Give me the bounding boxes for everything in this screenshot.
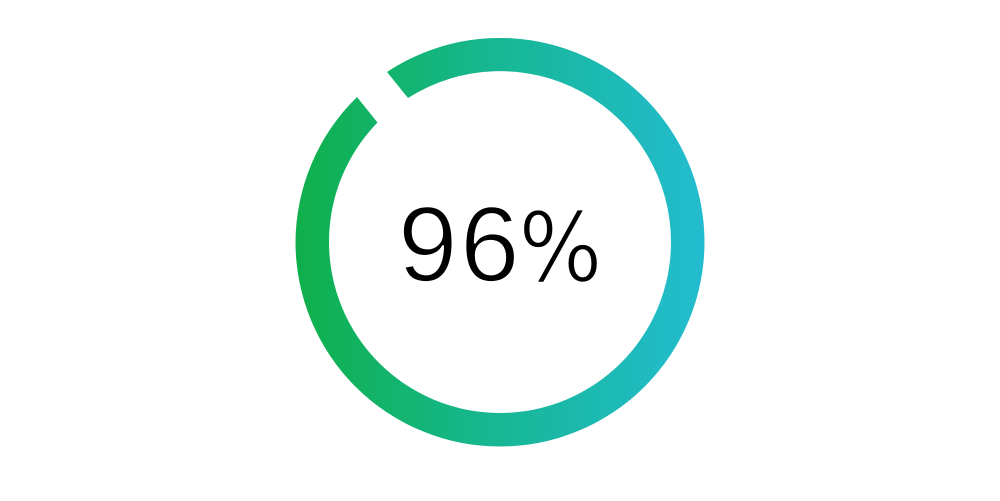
- progress ring: [296, 38, 704, 447]
- percentage value: 9: [398, 184, 458, 304]
- percentage value: [398, 184, 602, 304]
- percentage value: %: [518, 191, 602, 304]
- percentage value: 6: [460, 184, 520, 304]
